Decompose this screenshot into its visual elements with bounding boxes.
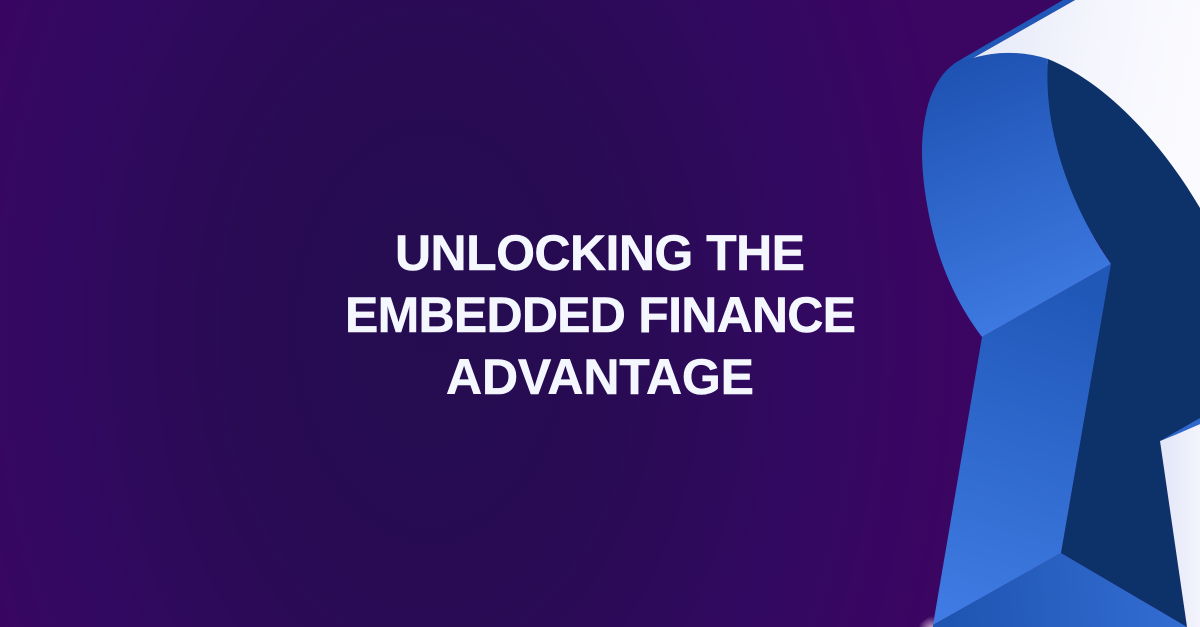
keyhole: blue edge sliver (960, 0, 1075, 70)
title: UNLOCKING THE (395, 225, 805, 281)
keyhole: white surface upper (973, 0, 1200, 260)
keyhole: glow at base (915, 612, 936, 627)
keyhole: white surface lower (1160, 424, 1200, 627)
keyhole: lit curved wall (922, 53, 1111, 337)
icon: 3D keyhole (915, 0, 1200, 627)
title: EMBEDDED FINANCE (345, 287, 856, 343)
keyhole: lit shaft wall (933, 264, 1111, 625)
keyhole: dark inner wall (1040, 59, 1200, 627)
title: ADVANTAGE (446, 349, 754, 405)
keyhole: lower blue edge (1160, 418, 1200, 441)
keyhole: floor wall (933, 553, 1187, 627)
title (345, 225, 856, 405)
